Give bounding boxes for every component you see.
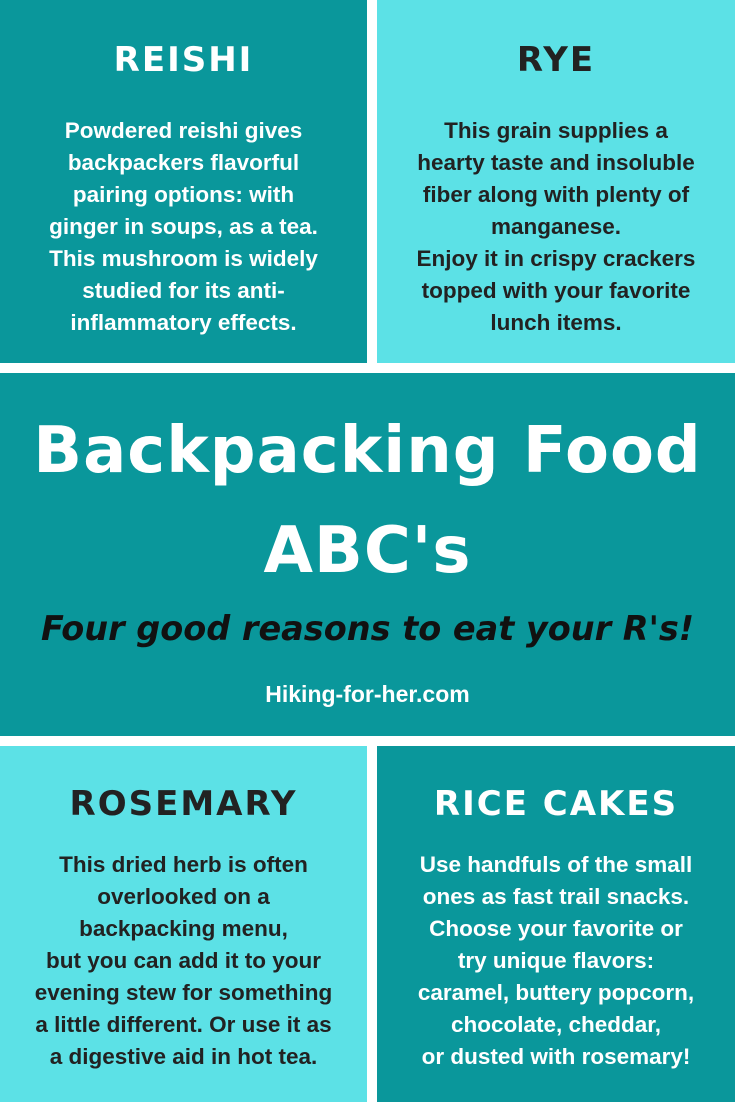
text: rice cakes: Choose your favorite or	[429, 916, 683, 941]
panel: reishi	[0, 0, 367, 363]
heading: reishi: REISHI	[114, 40, 253, 80]
text: rice cakes: or dusted with rosemary!	[422, 1044, 690, 1069]
text: reishi: Powdered reishi gives	[65, 118, 302, 143]
text: rye	[417, 118, 695, 335]
text: rosemary: a digestive aid in hot tea.	[50, 1044, 317, 1069]
heading: rice cakes: RICE CAKES	[434, 784, 678, 824]
panel: rye	[377, 0, 735, 363]
text: rye: manganese.	[491, 214, 621, 239]
heading: rye: RYE	[517, 40, 595, 80]
text: rice cakes: chocolate, cheddar,	[451, 1012, 661, 1037]
text: rice cakes	[418, 852, 694, 1069]
text: rye: topped with your favorite	[422, 278, 690, 303]
text: rye: fiber along with plenty of	[423, 182, 689, 207]
text: rye: Enjoy it in crispy crackers	[417, 246, 695, 271]
text: rosemary: This dried herb is often	[59, 852, 308, 877]
title	[33, 414, 702, 588]
text: rye: lunch items.	[490, 310, 622, 335]
text: rosemary: a little different. Or use it as	[35, 1012, 332, 1037]
text: rosemary	[35, 852, 332, 1069]
panel: title band	[0, 373, 735, 736]
text: rosemary: evening stew for something	[35, 980, 332, 1005]
heading: rosemary: ROSEMARY	[70, 784, 297, 824]
title: Backpacking Food	[33, 414, 702, 488]
text: rosemary: backpacking menu,	[79, 916, 288, 941]
subtitle: Four good reasons to eat your R's!	[41, 609, 694, 648]
text: rice cakes: ones as fast trail snacks.	[423, 884, 689, 909]
text: rice cakes: Use handfuls of the small	[420, 852, 692, 877]
website: Hiking-for-her.com	[265, 681, 470, 707]
text: reishi: ginger in soups, as a tea.	[49, 214, 318, 239]
text: rice cakes: caramel, buttery popcorn,	[418, 980, 694, 1005]
text: rye: This grain supplies a	[444, 118, 668, 143]
text: rye: hearty taste and insoluble	[417, 150, 695, 175]
text: reishi	[49, 118, 318, 335]
text: reishi: inflammatory effects.	[70, 310, 297, 335]
title: ABC's	[264, 514, 471, 588]
text: reishi: backpackers flavorful	[68, 150, 299, 175]
text: rosemary: but you can add it to your	[46, 948, 321, 973]
panel: rice cakes	[377, 746, 735, 1102]
text: reishi: studied for its anti-	[82, 278, 285, 303]
text: reishi: This mushroom is widely	[49, 246, 318, 271]
text: rice cakes: try unique flavors:	[458, 948, 654, 973]
text: rosemary: overlooked on a	[97, 884, 270, 909]
text: reishi: pairing options: with	[73, 182, 294, 207]
panel: rosemary	[0, 746, 367, 1102]
